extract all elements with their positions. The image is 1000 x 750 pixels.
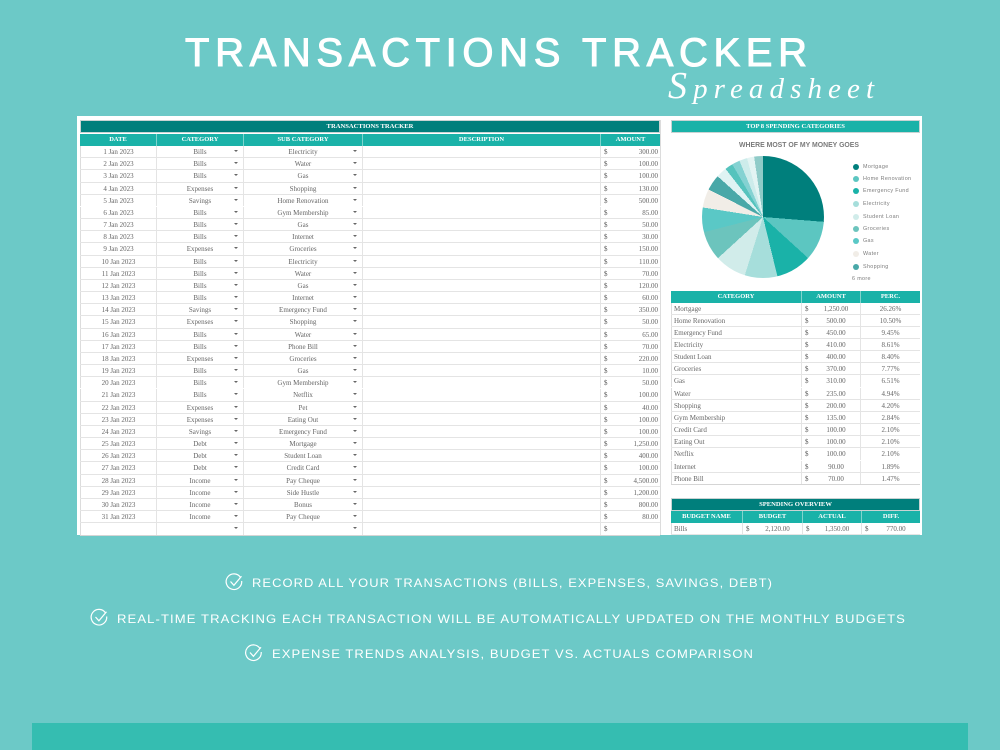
category table rows: 310.00	[826, 377, 846, 385]
table rows: Water	[295, 270, 311, 278]
table rows: Expenses	[187, 355, 213, 363]
panel: transactions table	[80, 120, 661, 535]
table rows: 25 Jan 2023	[102, 440, 135, 448]
category table rows: 235.00	[826, 390, 846, 398]
overview header row: BUDGET	[759, 513, 786, 520]
table rows: Electricity	[288, 148, 318, 156]
category table rows: Electricity	[674, 341, 703, 349]
chart legend: Shopping	[863, 264, 889, 270]
overview bills row: $	[806, 524, 810, 532]
table rows: Groceries	[289, 245, 317, 253]
category table rows: 4.94%	[881, 390, 900, 398]
table rows: 100.00	[639, 172, 658, 180]
panel: spending overview	[671, 498, 920, 535]
category table rows: $	[805, 450, 808, 458]
category table rows: Groceries	[674, 365, 701, 373]
table rows: 12 Jan 2023	[102, 282, 135, 290]
category table rows: Mortgage	[674, 304, 701, 312]
table rows: 11 Jan 2023	[102, 270, 135, 278]
table rows: $	[604, 148, 608, 156]
table rows: 27 Jan 2023	[102, 464, 135, 472]
category table header: CATEGORY	[718, 293, 754, 300]
table rows: Bills	[193, 379, 207, 387]
category table rows: $	[805, 426, 808, 434]
table rows: $	[604, 258, 608, 266]
table rows: $	[604, 197, 608, 205]
chart legend: Groceries	[863, 226, 890, 232]
table rows: 7 Jan 2023	[103, 221, 134, 229]
table rows: 50.00	[642, 318, 658, 326]
category table rows: Eating Out	[674, 438, 705, 446]
table rows: Savings	[189, 428, 211, 436]
category table rows: 9.45%	[881, 329, 900, 337]
table rows: Water	[295, 331, 311, 339]
category table rows: 100.00	[826, 450, 846, 458]
subtitle: Spreadsheet	[668, 66, 875, 107]
table rows: 70.00	[642, 343, 658, 351]
feature: record transactions: RECORD ALL YOUR TRANSACTIONS (BILLS, EXPENSES, SAVINGS, DEBT)	[252, 576, 773, 590]
category table rows: $	[805, 329, 808, 337]
category table rows: 2.84%	[881, 414, 900, 422]
table rows: Side Hustle	[287, 489, 319, 497]
table rows: Bills	[193, 282, 207, 290]
category table rows: $	[805, 438, 808, 446]
category table rows: 1.47%	[881, 475, 900, 483]
category table rows: 90.00	[828, 463, 844, 471]
overview bills row: $	[746, 524, 750, 532]
table rows: Gym Membership	[277, 379, 329, 387]
category table rows: Phone Bill	[674, 475, 704, 483]
table rows: $	[604, 477, 608, 485]
overview bills row: Bills	[674, 524, 687, 532]
table rows: 110.00	[639, 258, 658, 266]
table header row: CATEGORY	[182, 136, 218, 143]
table rows: $	[604, 391, 608, 399]
table rows: Bonus	[294, 501, 312, 509]
table rows: Student Loan	[284, 452, 322, 460]
table rows: $	[604, 404, 608, 412]
table rows: $	[604, 160, 608, 168]
table rows: $	[604, 343, 608, 351]
table rows: Income	[190, 477, 210, 485]
panel: spreadsheet screenshot	[77, 116, 922, 535]
table rows: 31 Jan 2023	[102, 513, 135, 521]
table rows: Netflix	[293, 391, 313, 399]
table rows: 19 Jan 2023	[102, 367, 135, 375]
table rows: Bills	[193, 172, 207, 180]
chart legend: 6 more	[852, 276, 871, 282]
category table rows: 1.89%	[881, 463, 900, 471]
table rows: $	[604, 245, 608, 253]
category table rows	[671, 303, 920, 485]
table rows: $	[604, 294, 608, 302]
title: TRANSACTIONS TRACKER	[185, 31, 807, 75]
chart title: WHERE MOST OF MY MONEY GOES	[739, 142, 859, 149]
table rows: Expenses	[187, 318, 213, 326]
table rows: Expenses	[187, 185, 213, 193]
table rows	[80, 146, 660, 536]
table rows: 4 Jan 2023	[103, 185, 134, 193]
table rows: 13 Jan 2023	[102, 294, 135, 302]
table rows: Gas	[298, 282, 308, 290]
feature list	[90, 573, 906, 662]
category table rows: 4.20%	[881, 402, 900, 410]
table rows: Gas	[298, 172, 308, 180]
table rows: Bills	[193, 391, 207, 399]
chart legend: Home Renovation	[863, 176, 911, 182]
category table rows: 1,250.00	[824, 304, 848, 312]
table rows: 350.00	[639, 306, 658, 314]
table rows: Mortgage	[289, 440, 317, 448]
table rows: Bills	[193, 148, 207, 156]
table rows: Bills	[193, 160, 207, 168]
category table rows: 8.61%	[881, 341, 900, 349]
table rows: 30 Jan 2023	[102, 501, 135, 509]
table rows: Pet	[299, 404, 307, 412]
table rows: 220.00	[639, 355, 658, 363]
table rows: 10.00	[642, 367, 658, 375]
table rows: 10 Jan 2023	[102, 258, 135, 266]
overview title bar	[671, 498, 920, 510]
chart legend	[852, 164, 911, 282]
table rows: Gas	[298, 367, 308, 375]
table rows: Internet	[292, 294, 314, 302]
table rows: $	[604, 440, 608, 448]
table rows: 6 Jan 2023	[103, 209, 134, 217]
overview header row: DIFF.	[883, 513, 899, 520]
table rows: $	[604, 233, 608, 241]
table rows: 30.00	[642, 233, 658, 241]
table rows: $	[604, 209, 608, 217]
table rows: 100.00	[639, 160, 658, 168]
table rows: Shopping	[290, 185, 316, 193]
table rows: 20 Jan 2023	[102, 379, 135, 387]
table rows: $	[604, 355, 608, 363]
table rows: 15 Jan 2023	[102, 318, 135, 326]
table rows: Emergency Fund	[279, 306, 327, 314]
table rows: 4,500.00	[634, 477, 658, 485]
category table rows: 6.51%	[881, 377, 900, 385]
pie chart	[702, 156, 824, 278]
table rows: Pay Cheque	[286, 477, 320, 485]
category table rows: 400.00	[826, 353, 846, 361]
table rows: $	[604, 331, 608, 339]
category table rows: 2.10%	[881, 426, 900, 434]
table rows: Debt	[193, 464, 207, 472]
table rows: Income	[190, 489, 210, 497]
table rows: $	[604, 221, 608, 229]
table rows: Phone Bill	[288, 343, 318, 351]
table rows: 16 Jan 2023	[102, 331, 135, 339]
table rows: Bills	[193, 233, 207, 241]
category table rows: $	[805, 402, 808, 410]
table rows: 50.00	[642, 221, 658, 229]
panel: category table	[671, 291, 920, 485]
overview bills row: 1,350.00	[825, 524, 849, 532]
table rows: 65.00	[642, 331, 658, 339]
table rows: $	[604, 416, 608, 424]
category table rows: 2.10%	[881, 450, 900, 458]
table rows: $	[604, 270, 608, 278]
feature: real-time tracking: REAL-TIME TRACKING EACH TRANSACTION WILL BE AUTOMATICALLY UPDATED ON THE MONTHLY BUDGETS	[117, 612, 906, 626]
category table rows: 26.26%	[880, 304, 901, 312]
table title bar	[80, 120, 660, 133]
table rows: Expenses	[187, 245, 213, 253]
table rows: 1,250.00	[634, 440, 658, 448]
table rows: 120.00	[639, 282, 658, 290]
category table rows: 450.00	[826, 329, 846, 337]
table rows: 28 Jan 2023	[102, 477, 135, 485]
table rows: 100.00	[639, 416, 658, 424]
table header row: DESCRIPTION	[459, 136, 504, 143]
category table rows: Netflix	[674, 450, 694, 458]
table rows: 1,200.00	[634, 489, 658, 497]
table rows: $	[604, 489, 608, 497]
table rows: 8 Jan 2023	[103, 233, 134, 241]
table rows: $	[604, 428, 608, 436]
table rows: 9 Jan 2023	[103, 245, 134, 253]
category table header: AMOUNT	[816, 293, 846, 300]
table rows: $	[604, 306, 608, 314]
table rows: 24 Jan 2023	[102, 428, 135, 436]
table rows: 60.00	[642, 294, 658, 302]
category table rows: $	[805, 390, 808, 398]
chart legend: Gas	[863, 238, 874, 244]
category table rows: 370.00	[826, 365, 846, 373]
category table rows: $	[805, 377, 808, 385]
overview header row	[671, 511, 920, 522]
category table rows: Credit Card	[674, 426, 707, 434]
table header row	[80, 134, 660, 146]
table rows: $	[604, 172, 608, 180]
table rows: Bills	[193, 367, 207, 375]
category table rows: Home Renovation	[674, 317, 725, 325]
table rows: Internet	[292, 233, 314, 241]
table rows: 500.00	[639, 197, 658, 205]
table rows: 50.00	[642, 379, 658, 387]
category table header	[671, 291, 920, 302]
table rows: Savings	[189, 197, 211, 205]
overview bills row: 2,120.00	[765, 524, 790, 532]
heading: top spending categories	[671, 120, 920, 133]
category table rows: 410.00	[826, 341, 846, 349]
table rows: 5 Jan 2023	[103, 197, 134, 205]
category table rows: 70.00	[828, 475, 844, 483]
category table rows: $	[805, 341, 808, 349]
table rows: Debt	[193, 440, 207, 448]
category table header: PERC.	[881, 293, 900, 300]
table rows: 3 Jan 2023	[103, 172, 134, 180]
chart legend: Mortgage	[863, 164, 889, 170]
table rows: Eating Out	[288, 416, 318, 424]
table rows: Credit Card	[287, 464, 319, 472]
table rows: Income	[190, 501, 210, 509]
category table rows: $	[805, 304, 808, 312]
category table rows: 8.40%	[881, 353, 900, 361]
table rows: 40.00	[642, 404, 658, 412]
category table rows: $	[805, 414, 808, 422]
table rows: 18 Jan 2023	[102, 355, 135, 363]
table rows: Pay Cheque	[286, 513, 320, 521]
table rows: 85.00	[642, 209, 658, 217]
table header row: SUB CATEGORY	[277, 136, 329, 143]
category table rows: $	[805, 317, 808, 325]
table rows: 23 Jan 2023	[102, 416, 135, 424]
table rows: 2 Jan 2023	[103, 160, 134, 168]
table rows: $	[604, 464, 608, 472]
table rows: $	[604, 282, 608, 290]
category table rows: Water	[674, 390, 691, 398]
category table rows: 135.00	[826, 414, 846, 422]
table rows: Bills	[193, 343, 207, 351]
chart legend: Emergency Fund	[863, 188, 909, 194]
table rows: $	[604, 525, 608, 533]
table title bar: TRANSACTIONS TRACKER	[327, 123, 413, 130]
table rows: 1 Jan 2023	[103, 148, 134, 156]
table rows: 17 Jan 2023	[102, 343, 135, 351]
table rows: $	[604, 367, 608, 375]
table rows: Bills	[193, 331, 207, 339]
table rows: Gas	[298, 221, 308, 229]
table rows: 150.00	[639, 245, 658, 253]
category table rows: $	[805, 475, 808, 483]
table rows: 300.00	[639, 148, 658, 156]
category table rows: Student Loan	[674, 353, 712, 361]
table rows: $	[604, 452, 608, 460]
overview header row: BUDGET NAME	[682, 513, 731, 520]
table rows: $	[604, 379, 608, 387]
table rows: 29 Jan 2023	[102, 489, 135, 497]
table header row: DATE	[109, 136, 127, 143]
table rows: Gym Membership	[277, 209, 329, 217]
category table rows: Internet	[674, 463, 696, 471]
category table rows: Gym Membership	[674, 414, 725, 422]
category table rows: 100.00	[826, 438, 846, 446]
category table rows: $	[805, 353, 808, 361]
category table rows: 100.00	[826, 426, 846, 434]
category table rows: 500.00	[826, 317, 846, 325]
category table rows: 2.10%	[881, 438, 900, 446]
table rows: $	[604, 513, 608, 521]
table header row: AMOUNT	[616, 136, 645, 143]
table rows: 100.00	[639, 428, 658, 436]
overview header row: ACTUAL	[818, 513, 846, 520]
table rows: Bills	[193, 221, 207, 229]
table rows: Bills	[193, 209, 207, 217]
table rows: Debt	[193, 452, 207, 460]
feature: expense trends: EXPENSE TRENDS ANALYSIS, BUDGET VS. ACTUALS COMPARISON	[272, 647, 754, 661]
overview bills row	[671, 522, 920, 535]
table rows: 800.00	[639, 501, 658, 509]
table rows: Electricity	[288, 258, 318, 266]
category table rows: 10.50%	[880, 317, 901, 325]
table rows: $	[604, 185, 608, 193]
table rows: Income	[190, 513, 210, 521]
table rows: Emergency Fund	[279, 428, 327, 436]
table rows: 130.00	[639, 185, 658, 193]
table rows: Shopping	[290, 318, 316, 326]
table rows: 400.00	[639, 452, 658, 460]
category table rows: $	[805, 365, 808, 373]
table rows: Water	[295, 160, 311, 168]
overview bills row: $	[865, 524, 868, 532]
overview title bar: SPENDING OVERVIEW	[759, 501, 832, 508]
category table rows: Shopping	[674, 402, 701, 410]
table rows: 21 Jan 2023	[102, 391, 135, 399]
category table rows: Gas	[674, 377, 685, 385]
table rows: 70.00	[642, 270, 658, 278]
table rows: Savings	[189, 306, 211, 314]
table rows: 22 Jan 2023	[102, 404, 135, 412]
table rows: Expenses	[187, 404, 213, 412]
table rows: Home Renovation	[277, 197, 329, 205]
table rows: 100.00	[639, 391, 658, 399]
category table rows: 200.00	[826, 402, 846, 410]
table rows: $	[604, 318, 608, 326]
category table rows: Emergency Fund	[674, 329, 722, 337]
table rows: Bills	[193, 270, 207, 278]
table rows: Bills	[193, 258, 207, 266]
table rows: 14 Jan 2023	[102, 306, 135, 314]
table rows: Groceries	[289, 355, 317, 363]
table rows: Expenses	[187, 416, 213, 424]
category table rows: 7.77%	[881, 365, 900, 373]
category table rows: $	[805, 463, 808, 471]
table rows: $	[604, 501, 608, 509]
table rows: 100.00	[639, 464, 658, 472]
chart legend: Electricity	[863, 201, 890, 207]
heading: top spending categories: TOP 8 SPENDING CATEGORIES	[746, 123, 845, 130]
table rows: 26 Jan 2023	[102, 452, 135, 460]
footer band	[32, 723, 968, 750]
chart legend: Student Loan	[863, 214, 899, 220]
overview bills row: 770.00	[886, 524, 906, 532]
table rows: Bills	[193, 294, 207, 302]
table rows: 80.00	[642, 513, 658, 521]
chart legend: Water	[863, 251, 879, 257]
